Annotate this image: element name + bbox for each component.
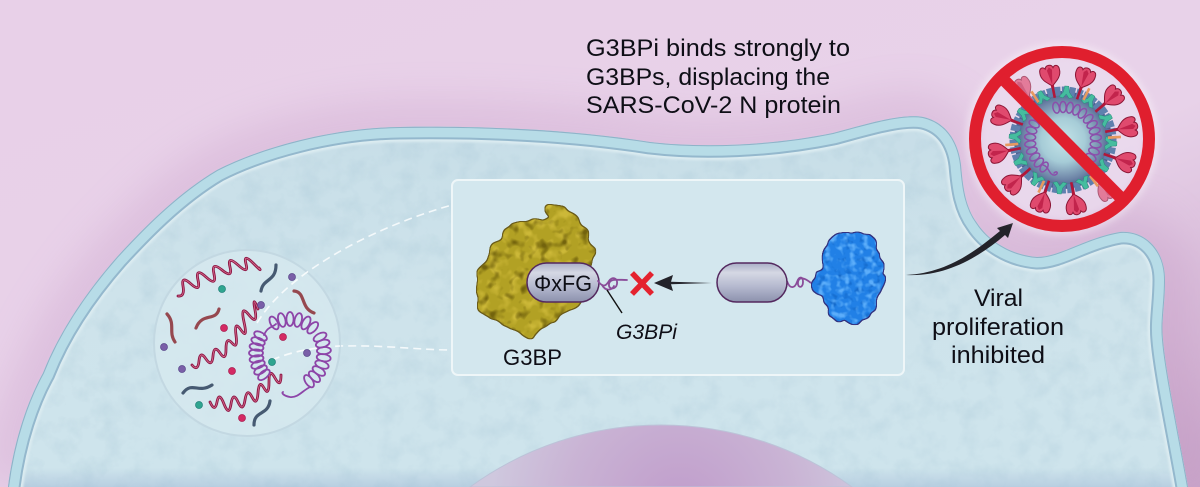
viral RNA — [1024, 102, 1102, 175]
inset panel — [452, 180, 904, 375]
RNA highlights — [178, 258, 281, 410]
label: G3BPi: G3BPi — [616, 321, 678, 344]
red prohibition ring — [975, 52, 1149, 226]
short slate strands — [183, 265, 276, 425]
N protein (blue) — [812, 233, 885, 323]
outcome text: inhibited — [951, 342, 1045, 369]
G3BP FG-binding pill — [527, 263, 599, 302]
top annotation: SARS-CoV-2 N protein — [586, 92, 841, 119]
arrow: N protein approach — [654, 275, 712, 291]
top annotation: G3BPi binds strongly to — [586, 35, 850, 62]
outcome text: Viral — [974, 285, 1023, 312]
pink dots — [220, 324, 286, 422]
outcome text: proliferation — [932, 314, 1064, 341]
top annotation — [586, 35, 850, 119]
label: PhixFG: ΦxFG — [534, 271, 592, 296]
circular viral RNA coil — [249, 312, 331, 397]
red slash — [1001, 77, 1124, 201]
nucleus — [470, 425, 852, 487]
N protein linker — [787, 278, 811, 287]
spike stems over envelope — [1008, 85, 1118, 195]
red X: binding blocked — [632, 273, 652, 294]
spike proteins — [986, 63, 1140, 217]
RNA strands — [178, 258, 281, 410]
short brown strands — [167, 291, 314, 342]
curved arrow to virus — [906, 223, 1013, 275]
teal dots — [196, 286, 276, 408]
label: G3BP: G3BP — [503, 345, 562, 370]
shadow around cell — [8, 116, 1188, 487]
top annotation: G3BPs, displacing the — [586, 64, 830, 91]
dashed zoom lines — [257, 205, 452, 360]
purple dots — [160, 274, 310, 372]
outcome text — [932, 285, 1064, 369]
prohibited virus icon — [970, 47, 1154, 231]
cell with membrane and cytoplasm — [0, 100, 1200, 487]
envelope — [1014, 91, 1112, 189]
coronavirus — [986, 63, 1140, 217]
N protein pill — [717, 263, 787, 302]
dashed line over circle — [257, 270, 340, 360]
pointer to G3BPi — [607, 290, 622, 313]
G3BPi linker coil — [598, 278, 627, 290]
membrane proteins — [1009, 86, 1117, 194]
G3BP protein (olive) — [476, 208, 595, 337]
envelope proteins — [1005, 88, 1121, 193]
magnified circle: stress granule contents — [154, 250, 340, 436]
